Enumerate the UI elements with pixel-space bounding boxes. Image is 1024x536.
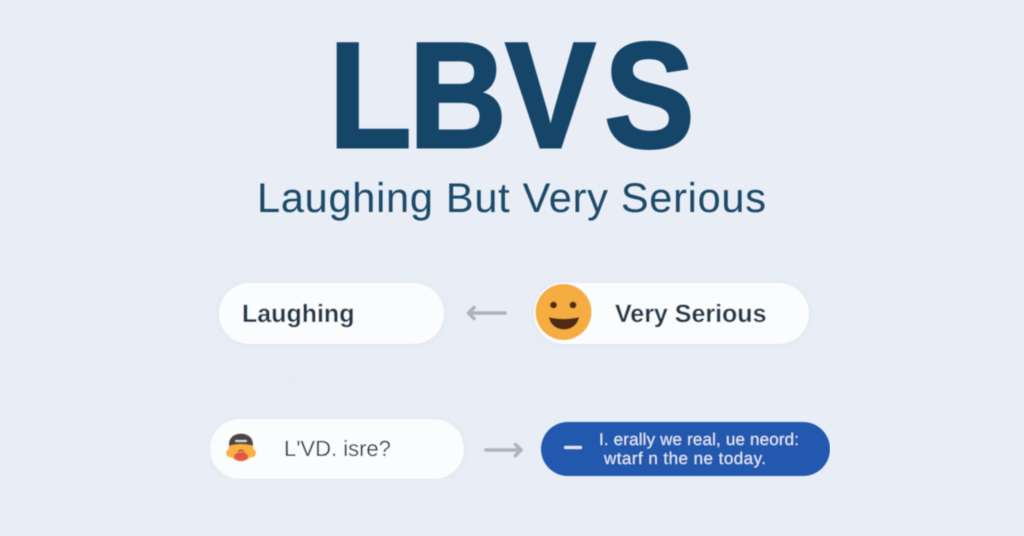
pill: Very Serious: Very Serious	[615, 300, 766, 328]
message text: I. erally we real, ue neord:	[599, 430, 799, 449]
icon: smiling face	[534, 282, 593, 342]
icon: dash	[564, 446, 582, 449]
pill: Laughing	[219, 283, 444, 344]
pill: blue message	[541, 422, 830, 476]
arrow: left	[468, 308, 505, 318]
title: LBVS	[329, 11, 694, 179]
icon: face with cap	[226, 434, 256, 462]
pill: Very Serious	[534, 282, 809, 344]
message text	[599, 430, 799, 468]
pill: question: L'VD. isre?	[284, 436, 391, 461]
pill: Laughing: Laughing	[242, 300, 354, 328]
subtitle: Laughing But Very Serious	[257, 174, 766, 221]
pill: question	[210, 419, 464, 479]
message text: wtarf n the ne today.	[603, 449, 766, 468]
arrow: right	[486, 444, 521, 456]
